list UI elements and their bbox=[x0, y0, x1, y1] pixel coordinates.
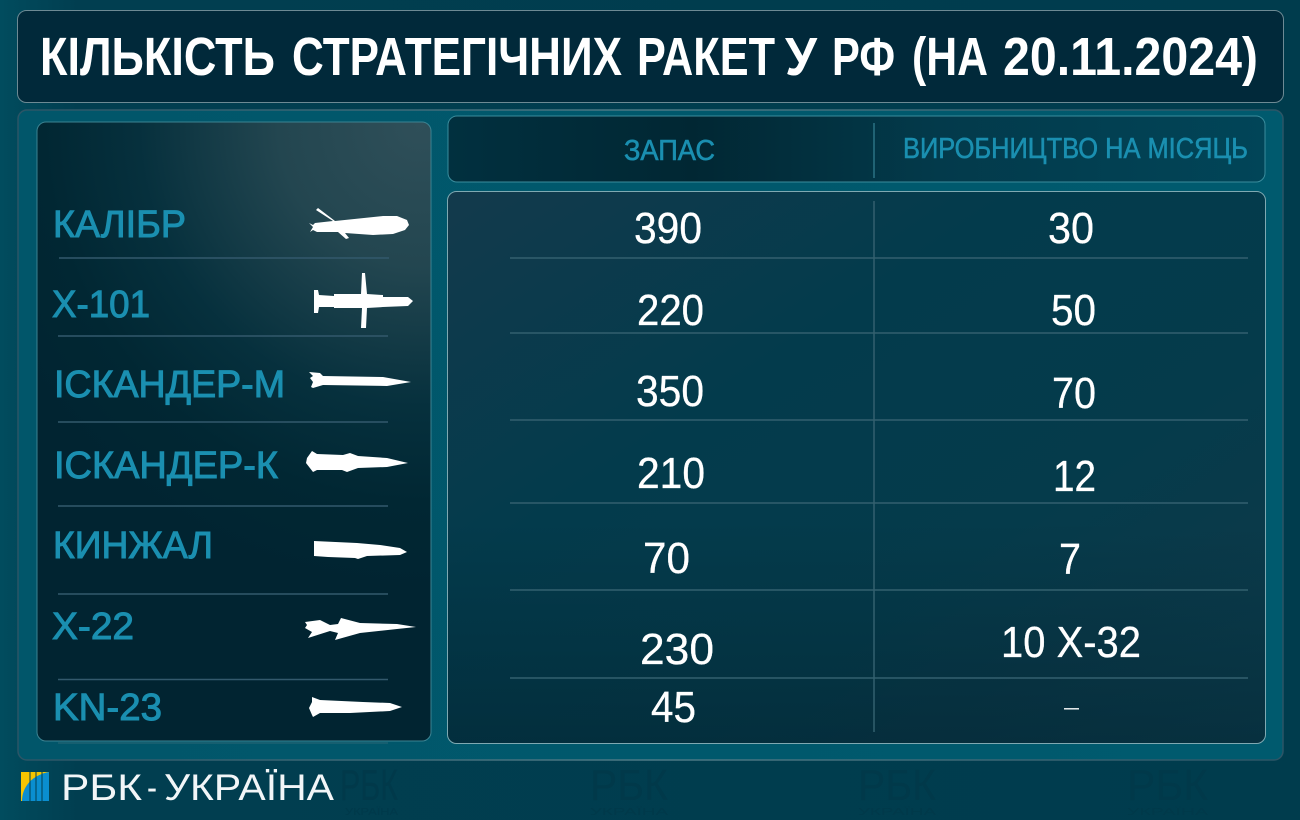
title: СТРАТЕГІЧНИХ bbox=[292, 27, 622, 87]
watermarks: РБК bbox=[858, 761, 936, 810]
watermarks: РБК bbox=[340, 761, 398, 810]
values: stock: 220 bbox=[637, 286, 704, 335]
label: Іскандер-К: ІСКАНДЕР-К bbox=[54, 445, 278, 487]
values: stock: 210 bbox=[637, 449, 705, 498]
values: monthly production bbox=[1001, 204, 1141, 719]
values: stock: 70 bbox=[643, 534, 690, 583]
icon: missile Іскандер-К bbox=[306, 451, 408, 472]
label: KN-23: KN-23 bbox=[53, 687, 162, 729]
panel: table values bbox=[448, 192, 1266, 744]
icon: missile Х-22 bbox=[305, 618, 416, 640]
label: Іскандер-М: ІСКАНДЕР-М bbox=[54, 364, 285, 406]
panel: main container bbox=[18, 110, 1283, 760]
watermarks: РБК bbox=[590, 761, 668, 810]
watermarks bbox=[340, 761, 1209, 818]
icon: missile KN-23 bbox=[309, 697, 402, 717]
title: 20.11.2024) bbox=[1003, 27, 1258, 87]
title: КІЛЬКІСТЬ bbox=[40, 27, 275, 87]
logo wordmark: РБК bbox=[61, 767, 143, 808]
heading: monthly production: ВИРОБНИЦТВО НА МІСЯЦЬ bbox=[903, 133, 1248, 165]
logo bbox=[21, 767, 334, 808]
values: monthly production: 7 bbox=[1059, 535, 1081, 584]
panel: missile names bbox=[37, 122, 431, 743]
values: stock: 390 bbox=[634, 204, 702, 253]
values: stock bbox=[634, 204, 714, 732]
icon: logo mark bbox=[21, 772, 49, 801]
values: stock: 45 bbox=[651, 683, 696, 732]
panel: table header bbox=[448, 116, 1265, 182]
label: Калібр: КАЛІБР bbox=[53, 204, 186, 246]
title: РФ bbox=[832, 27, 895, 87]
title bbox=[40, 27, 1258, 87]
label: Х-101: Х-101 bbox=[52, 284, 150, 326]
label: Кинжал: КИНЖАЛ bbox=[53, 525, 213, 567]
icon: missile Х-101 bbox=[314, 273, 413, 328]
values: stock: 230 bbox=[640, 625, 714, 674]
title: У bbox=[785, 27, 818, 87]
heading: stock: ЗАПАС bbox=[624, 135, 715, 167]
values: monthly production: – bbox=[1064, 697, 1080, 719]
title: РАКЕТ bbox=[637, 27, 775, 87]
logo wordmark: - bbox=[147, 767, 157, 808]
icon: missile Калібр bbox=[309, 208, 409, 239]
watermarks: УКРАЇНА bbox=[1127, 806, 1209, 818]
values: monthly production: 30 bbox=[1048, 204, 1094, 253]
logo wordmark: УКРАЇНА bbox=[164, 767, 334, 808]
watermarks: РБК bbox=[1127, 761, 1208, 810]
title: (НА bbox=[912, 27, 988, 87]
panel: title bbox=[18, 10, 1284, 102]
values: stock: 350 bbox=[636, 367, 704, 416]
label: Х-22: Х-22 bbox=[52, 606, 134, 648]
logo wordmark bbox=[61, 767, 334, 808]
icon: missile Кинжал bbox=[314, 541, 407, 559]
watermarks: УКРАЇНА bbox=[345, 806, 398, 818]
watermarks: УКРАЇНА bbox=[858, 806, 937, 818]
watermarks: УКРАЇНА bbox=[590, 806, 669, 818]
values: monthly production: 70 bbox=[1052, 369, 1096, 418]
values: monthly production: 10 Х-32 bbox=[1001, 618, 1141, 667]
icon: missile Іскандер-М bbox=[309, 372, 411, 388]
values: monthly production: 12 bbox=[1053, 452, 1096, 501]
values: monthly production: 50 bbox=[1051, 286, 1096, 335]
